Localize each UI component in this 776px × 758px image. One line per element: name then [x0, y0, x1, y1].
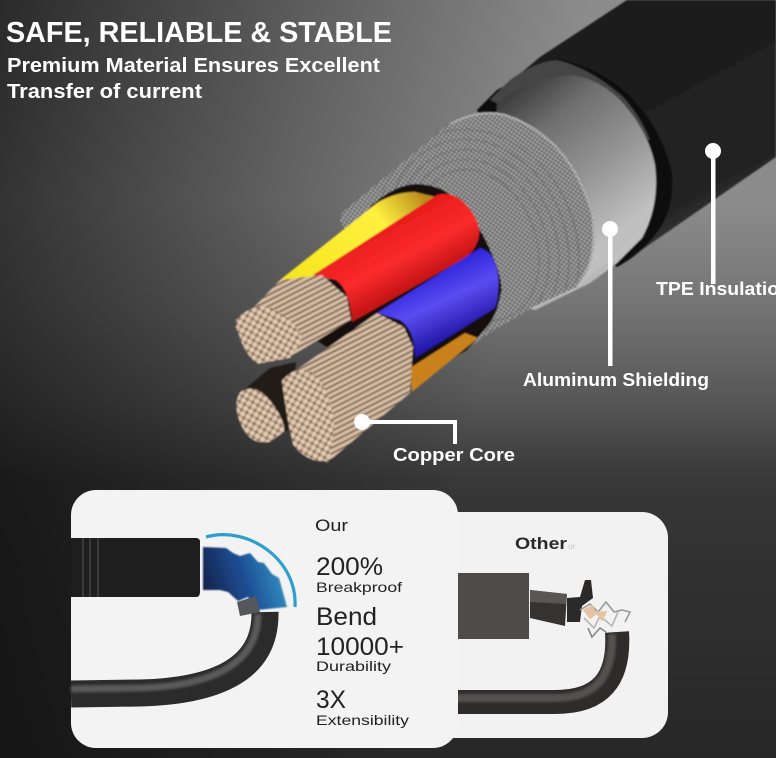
other strain relief: [530, 590, 567, 626]
orange wire: [410, 333, 478, 392]
braided shield: [340, 110, 595, 351]
callout: copper core: Copper Core: [393, 445, 515, 465]
red wire: [313, 194, 479, 322]
panel: our cable: [71, 490, 458, 748]
copper strands: upper bundle: [235, 275, 351, 363]
copper end face: upper bundle: [236, 306, 302, 364]
our specifications: Durability: [316, 658, 391, 674]
our specifications: 3X: [316, 686, 346, 714]
subtitle: Premium Material Ensures Excellent: [7, 55, 380, 77]
subtitle: Transfer of current: [7, 81, 202, 103]
our specifications: Our: [315, 516, 348, 535]
callout: copper core: [354, 414, 515, 465]
our specifications: 10000+: [316, 633, 404, 661]
our specifications: Bend: [316, 603, 377, 631]
callout: aluminum shielding: [523, 221, 709, 390]
copper strands: front bundle: [282, 313, 413, 463]
illustration: cable cross-section: [235, 0, 776, 463]
cable opening: [300, 184, 501, 390]
title: SAFE, RELIABLE & STABLE: [6, 17, 392, 49]
outer TPE jacket: [477, 0, 776, 267]
panel: other cable: or: [568, 542, 575, 551]
our specifications: [315, 516, 409, 728]
yellow wire: [280, 192, 436, 280]
our specifications: Extensibility: [316, 712, 409, 728]
our cable: [71, 612, 265, 694]
callout: TPE insulation: [656, 143, 776, 299]
subtitle: [7, 55, 380, 103]
damaged cable: [440, 632, 617, 702]
copper end face: lower-left bundle: [236, 389, 284, 443]
our specifications: 200%: [316, 553, 383, 581]
other plug: [440, 573, 529, 639]
frayed wires: [580, 602, 630, 637]
bend arc: [206, 535, 295, 607]
aluminum shielding: [490, 75, 656, 307]
callout: aluminum shielding: Aluminum Shielding: [523, 370, 709, 390]
copper end face: front bundle: [282, 370, 334, 461]
other label: Other: [515, 534, 567, 553]
our specifications: Breakproof: [316, 579, 402, 595]
blue bending boot: [203, 547, 287, 610]
copper strands: lower-left bundle: [238, 362, 296, 440]
our plug: [71, 538, 200, 597]
blue wire: [377, 248, 499, 358]
jacket collar: [477, 58, 672, 267]
panel: other cable: [400, 512, 668, 738]
